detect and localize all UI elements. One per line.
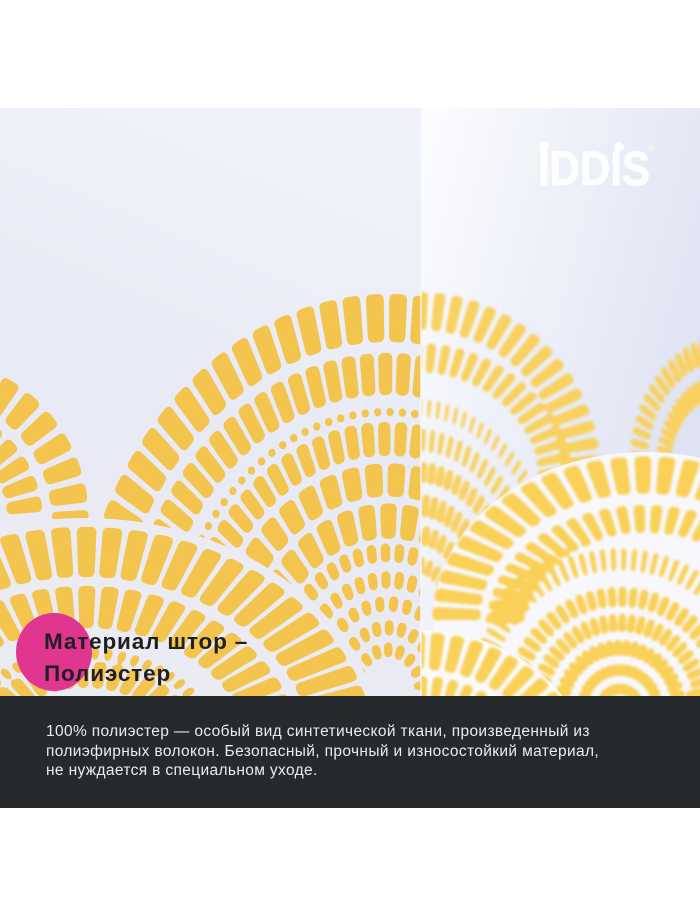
scallop: blurred bottom right fan xyxy=(684,688,700,696)
logo: IDDIS: ® xyxy=(648,143,655,153)
title: Полиэстер xyxy=(44,661,171,686)
description text: полиэфирных волокон. Безопасный, прочный и износостойкий материал, xyxy=(46,743,599,760)
panel: right curtain, out of focus xyxy=(421,108,700,696)
scallop: top left partial fan xyxy=(0,377,70,520)
description text: не нуждается в специальном уходе. xyxy=(46,762,318,779)
scallop: blurred upper left fan xyxy=(421,290,600,588)
description text: 100% полиэстер — особый вид синтетической ткани, произведенный из xyxy=(46,723,590,740)
scallop mask: big right fan background xyxy=(433,452,700,696)
scallop: blurred bottom left fan xyxy=(421,631,562,696)
logo: IDDIS: IDDIS xyxy=(538,143,650,196)
scallop: lower left fan xyxy=(0,526,365,696)
panel: left curtain close-up xyxy=(0,108,421,696)
pink blob behind title xyxy=(16,613,92,691)
scallop mask: lower fan background xyxy=(54,518,366,690)
title: Материал штор – xyxy=(44,629,248,654)
curtain fold line xyxy=(420,108,422,696)
scallop: blurred big right fan xyxy=(456,475,700,710)
title xyxy=(44,629,248,686)
description text xyxy=(46,723,599,779)
scallop mask: lower fans background xyxy=(422,630,562,696)
photo: curtain fabric with yellow scallop pattern xyxy=(0,108,700,696)
panel: description bar xyxy=(0,696,700,808)
scallop: blurred top right fan xyxy=(638,350,700,470)
scallop: large central fan xyxy=(104,294,421,690)
